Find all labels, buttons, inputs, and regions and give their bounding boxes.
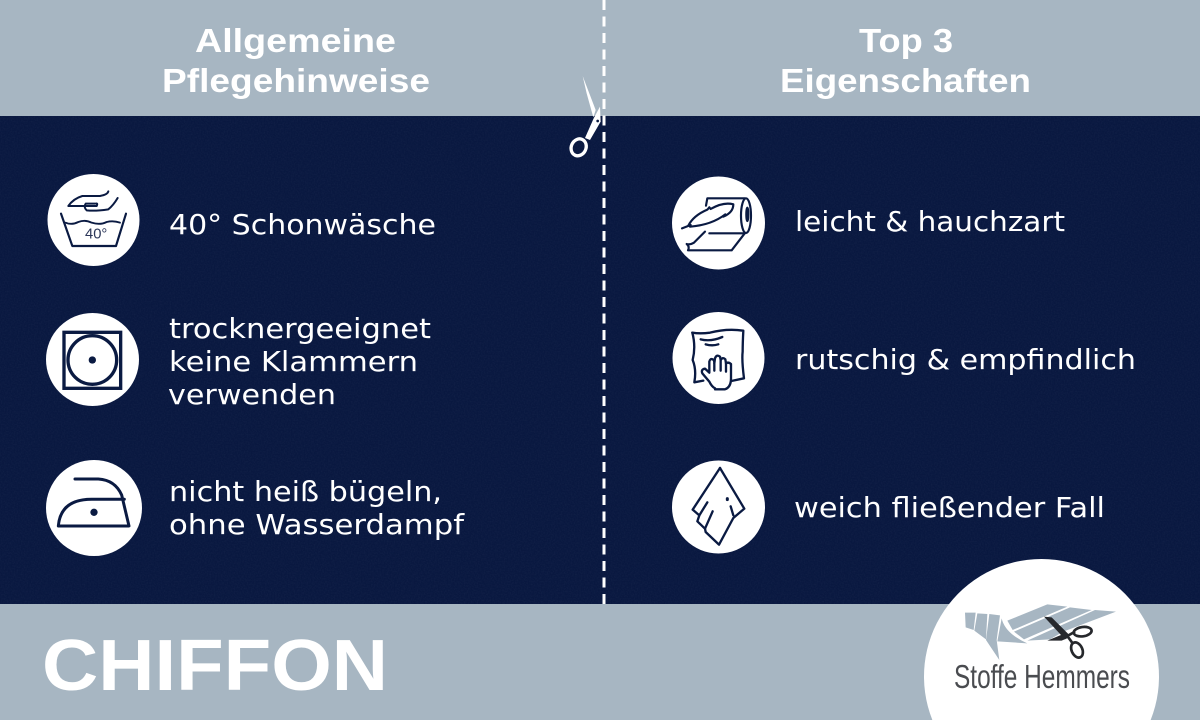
text: ironing guidance — [169, 475, 465, 541]
heading: Top 3 Eigenschaften — [780, 22, 1031, 99]
icon: wash at 40 degrees — [48, 174, 140, 266]
icon: draped fabric — [672, 460, 765, 554]
text: slippery and delicate: rutschig & empfindlich — [795, 343, 1136, 376]
text: light and delicate: leicht & hauchzart — [795, 205, 1065, 238]
text: soft flowing drape: weich fließender Fall — [794, 491, 1105, 524]
panel: bottom footer band — [0, 604, 1200, 720]
text: dryer guidance: verwenden — [168, 378, 336, 411]
logo: Stoffe Hemmers — [924, 559, 1159, 720]
icon: wash at 40 degrees: 40° — [85, 226, 107, 243]
icon: hand on slippery cloth — [672, 312, 764, 404]
panel: top header band — [0, 0, 1200, 116]
text: ironing guidance: ohne Wasserdampf — [169, 508, 465, 541]
icon: feather and fabric roll — [672, 176, 765, 270]
text: ironing guidance: nicht heiß bügeln, — [169, 475, 442, 508]
heading: Top 3 Eigenschaften: Eigenschaften — [780, 62, 1031, 99]
icon: scissors on cut line — [568, 76, 601, 158]
heading: Allgemeine Pflegehinweise: Pflegehinweise — [162, 62, 430, 99]
heading: Top 3 Eigenschaften: Top 3 — [859, 22, 953, 59]
panel: navy fabric background — [0, 116, 1200, 604]
text: dryer guidance: keine Klammern — [169, 345, 418, 378]
logo: Stoffe Hemmers: Stoffe Hemmers — [954, 658, 1130, 695]
text: 40 degree gentle wash: 40° Schonwäsche — [169, 208, 436, 241]
title: CHIFFON: CHIFFON — [42, 626, 388, 706]
heading: Allgemeine Pflegehinweise — [162, 22, 430, 99]
text: dryer guidance: trocknergeeignet — [169, 312, 431, 345]
icon: tumble dryer — [46, 313, 139, 406]
heading: Allgemeine Pflegehinweise: Allgemeine — [195, 22, 396, 59]
icon: iron — [46, 460, 142, 556]
text: dryer guidance — [168, 312, 431, 411]
